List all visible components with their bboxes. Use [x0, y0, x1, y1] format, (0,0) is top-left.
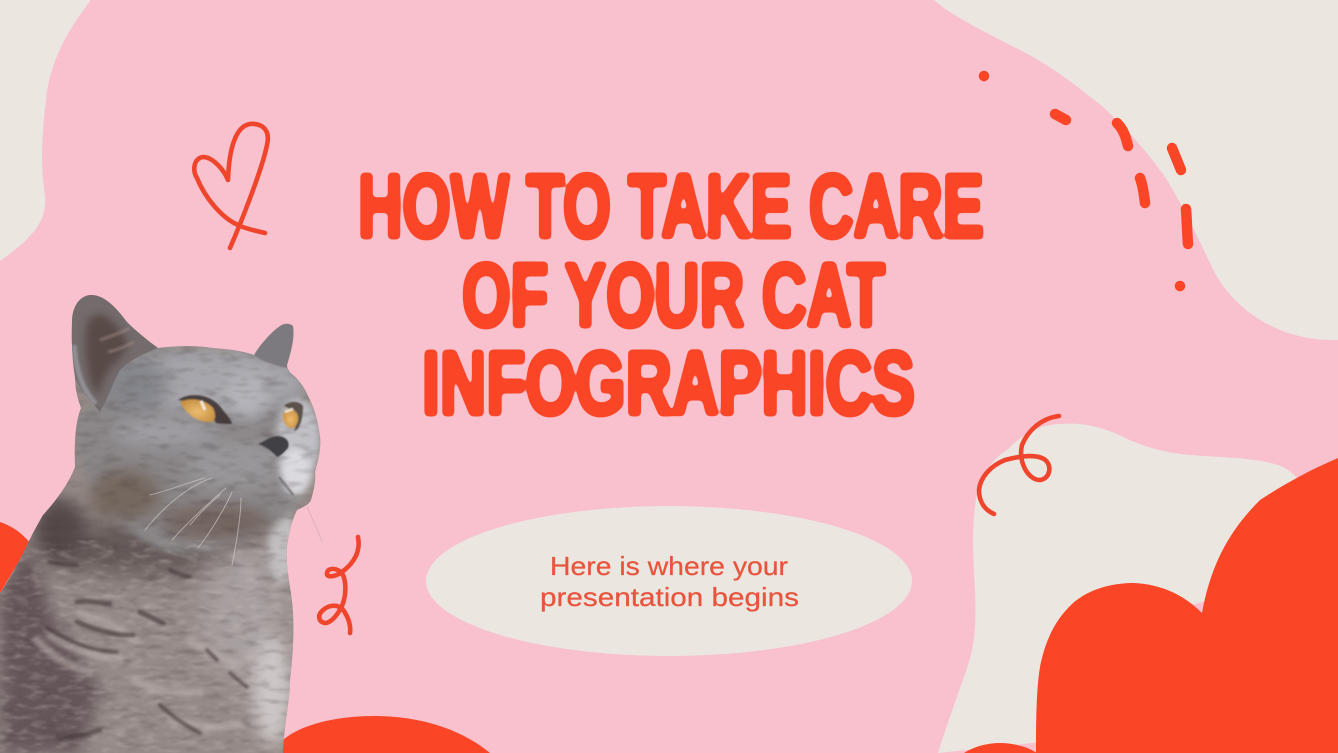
subtitle: [540, 551, 799, 612]
cat mouth: [279, 477, 293, 495]
blob: bottom-right cream: [938, 424, 1302, 753]
cat face: [75, 345, 320, 554]
ellipse: subtitle pill: [426, 506, 912, 656]
photo: grey cat: [0, 290, 330, 753]
cat ear left: [72, 295, 158, 412]
title: INFOGRAPHICS: [422, 334, 915, 434]
cat ear right: [254, 324, 294, 368]
blob: big red heart shape bottom-right: [1036, 458, 1338, 753]
title: [358, 157, 984, 434]
blob: red at left edge: [0, 522, 30, 593]
cat body fur: [0, 290, 330, 753]
title: OF YOUR CAT: [462, 246, 885, 346]
subtitle: Here is where your: [550, 551, 788, 581]
blob: red bump bottom-center: [282, 716, 490, 753]
cat eye right: [283, 402, 303, 431]
blob: top-left cream: [0, 0, 91, 261]
doodle: dashed arc: [984, 76, 1188, 286]
cat eye left: [178, 395, 232, 424]
doodle: curl right: [979, 416, 1059, 514]
cat whiskers: [145, 478, 322, 565]
subtitle: presentation begins: [540, 582, 799, 612]
cat fur texture: [0, 346, 319, 753]
title: HOW TO TAKE CARE: [358, 157, 984, 257]
cat chest fur folds: [37, 562, 247, 737]
blob: small red bump bottom-right: [964, 743, 1037, 753]
doodle: curl left: [319, 537, 359, 633]
cat nose: [258, 436, 289, 457]
blob: top-right cream: [934, 0, 1338, 340]
doodle: heart: [194, 124, 268, 248]
